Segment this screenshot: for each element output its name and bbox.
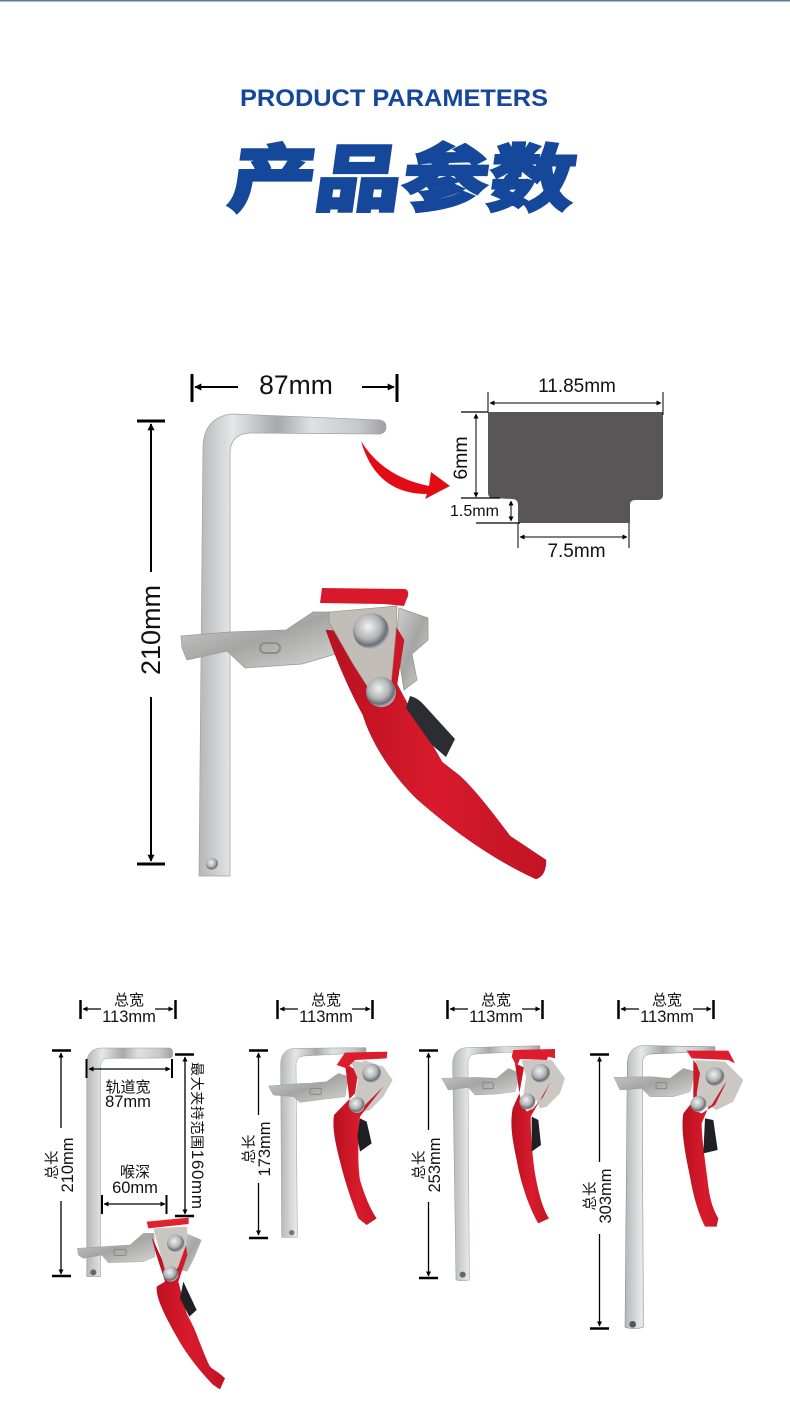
main clamp: red cap [320,588,408,606]
dimension: clamp B total width: 总宽 [311,992,341,1009]
main clamp: slider [181,612,336,668]
dimension: clamp C total width: 113mm [469,1008,523,1026]
arrow: red curved [361,441,450,499]
dimension: clamp A total width: 113mm [102,1008,156,1026]
rail cross-section profile [488,412,663,523]
dimension: rail width 87mm [86,1059,172,1111]
dimension: rail width 87mm: 87mm [105,1093,151,1111]
cross-section dimensions: 6mm [450,436,472,480]
small clamp B: 173mm [268,1048,393,1237]
dimension: clamp D total width [618,992,714,1026]
dimension: clamp C total length: 总长 [411,1150,428,1180]
dimension: clamp D total length: 303mm [597,1168,615,1224]
dimension: throat depth 60mm [102,1164,166,1214]
dimension: clamp A total width [80,992,176,1026]
dimension: clamp A total width: 总宽 [114,992,144,1009]
dimension: throat depth 60mm: 喉深 [120,1164,150,1181]
dimension: clamp B total length [241,1050,274,1238]
dimension: clamp B total length: 173mm [256,1121,274,1177]
dimension: clamp A total length: 总长 [44,1150,61,1180]
dimension: clamp C total width [448,992,542,1026]
small clamp C: 253mm [442,1046,565,1281]
heading: english: PRODUCT PARAMETERS [240,85,548,112]
dimension: clamp A total length: 210mm [59,1137,77,1193]
main clamp: balls [353,613,389,649]
dimension: clamp C total length: 253mm [426,1137,444,1193]
dimension: clamp C total length [411,1050,444,1278]
dimension: clamp D total length: 总长 [582,1181,599,1210]
small clamp A: 210mm [77,1048,225,1389]
dimension: max clamping range 160mm: 最大夹持范围 160mm [188,1062,207,1209]
dimension: clamp C total width: 总宽 [481,992,511,1009]
top border line [0,0,790,2]
main clamp: pin [206,858,218,870]
dimension: clamp B total length: 总长 [241,1134,258,1164]
dimension: clamp B total width [278,992,372,1026]
small clamp D: 303mm [614,1046,743,1329]
cross-section dimensions: 7.5mm [547,541,606,562]
main clamp: handle [326,627,546,879]
dimension: rail width 87mm: 轨道宽 [105,1079,151,1096]
dimension: 210mm: 210mm [136,585,166,675]
dimension: clamp D total width: 113mm [640,1008,694,1026]
main clamp illustration [181,414,546,879]
main clamp: grip [406,696,455,757]
cross-section dimensions: 1.5mm [450,503,499,520]
cross-section dimensions: 11.85mm [538,376,616,397]
dimension: clamp D total width: 总宽 [652,992,682,1009]
dimension: clamp A total length [44,1050,77,1276]
dimension: clamp B total width: 113mm [299,1008,353,1026]
heading: chinese: 产品参数 [223,121,584,227]
dimension: 87mm: 87mm [259,370,333,400]
cross-section dimensions [450,376,663,562]
main clamp: rear plate [396,608,428,690]
main clamp: slot [260,643,280,653]
main clamp: cover plate [329,606,397,686]
main clamp: bar [199,414,386,876]
dimension: clamp D total length [582,1054,615,1328]
dimension: throat depth 60mm: 60mm [112,1179,158,1197]
